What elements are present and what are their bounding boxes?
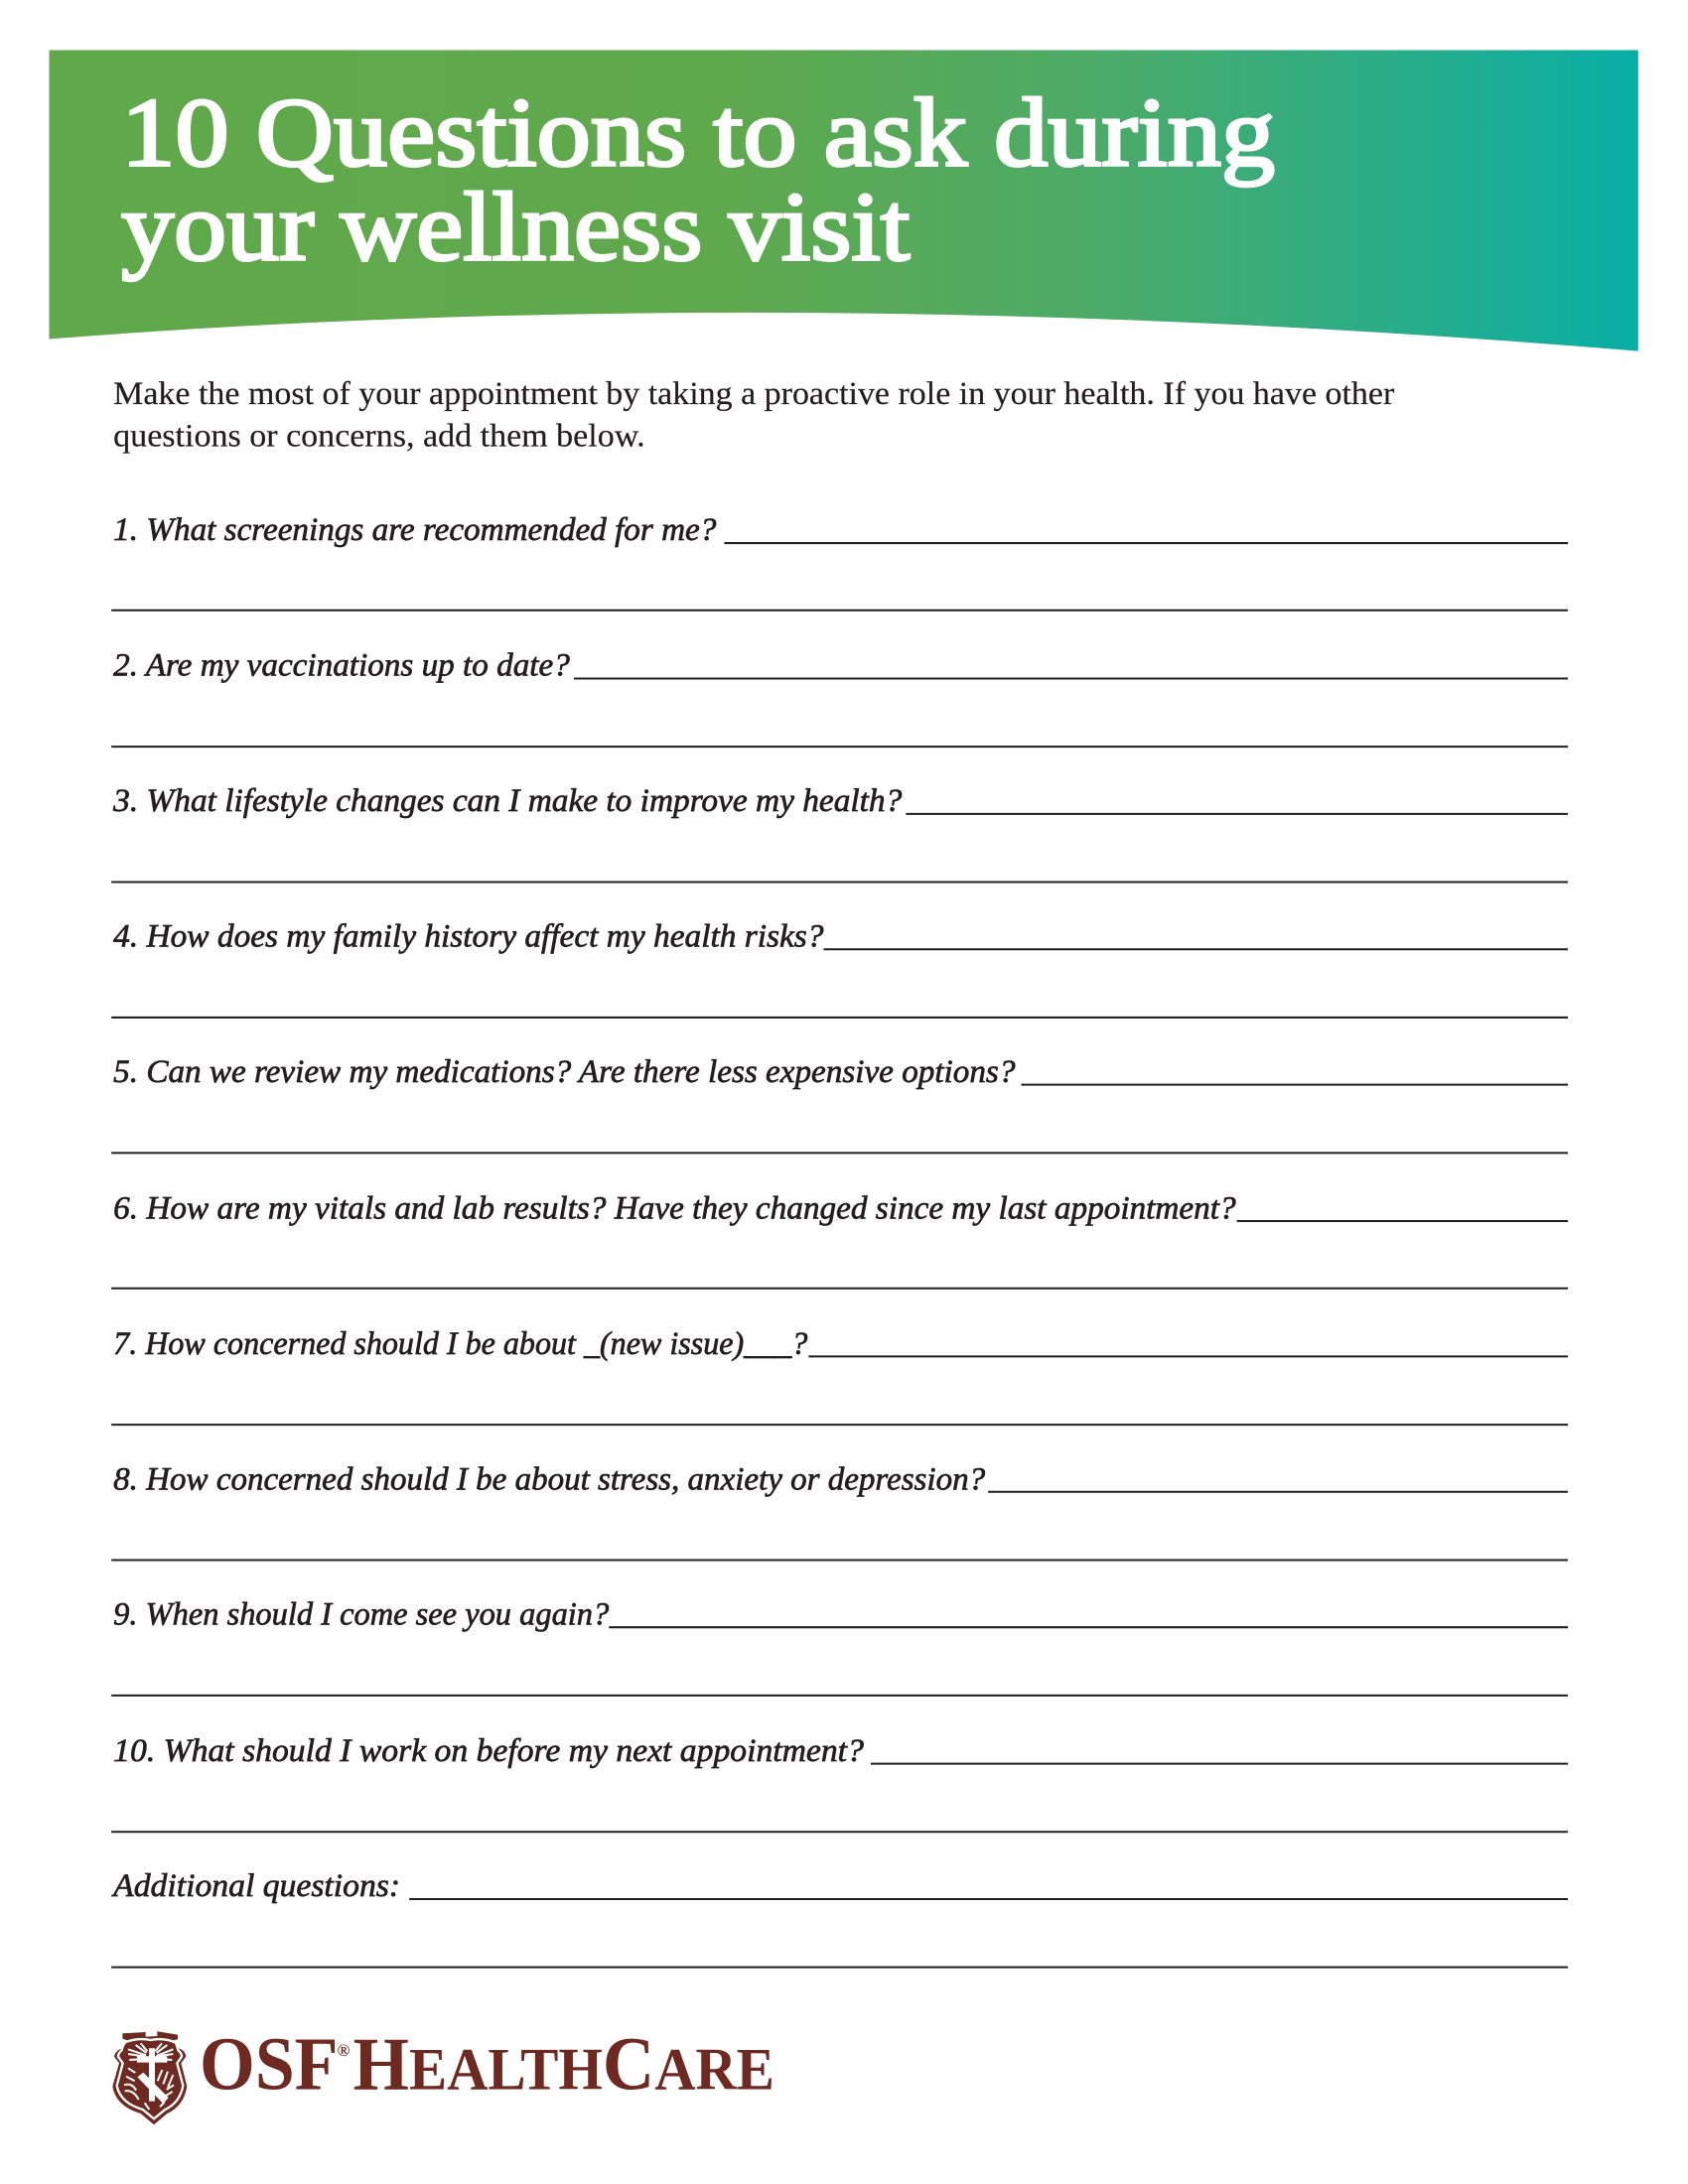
additional questions: Additional questions:: [111, 1867, 400, 1903]
question 6: [111, 1189, 1568, 1289]
question 6: 6. How are my vitals and lab results? Have they changed since my last appointment?: [113, 1189, 1236, 1225]
question 8: [111, 1460, 1568, 1561]
question 2: [111, 646, 1568, 747]
intro text: Make the most of your appointment by taking a proactive role in your health. If you have other: [113, 375, 1395, 411]
title: [121, 79, 1275, 282]
question 4: 4. How does my family history affect my health risks?: [113, 918, 823, 954]
question 7: 7. How concerned should I be about _(new issue)___?: [113, 1325, 807, 1361]
intro text: questions or concerns, add them below.: [113, 418, 645, 454]
icon: crest shield: [112, 2031, 187, 2124]
question 8: 8. How concerned should I be about stress, anxiety or depression?: [113, 1460, 985, 1496]
wordmark: OSF: [200, 2021, 338, 2106]
question 5: [111, 1053, 1568, 1153]
question 1: [111, 511, 1568, 611]
OSF HealthCare logo: [112, 2021, 774, 2124]
question 9: 9. When should I come see you again?: [113, 1596, 609, 1632]
question 3: [111, 782, 1568, 883]
question 3: 3. What lifestyle changes can I make to improve my health?: [112, 782, 902, 818]
question 10: [111, 1732, 1568, 1832]
question 5: 5. Can we review my medications? Are there less expensive options?: [113, 1053, 1015, 1089]
wordmark: HEALTHCARE: [353, 2021, 774, 2106]
question 10: 10. What should I work on before my next appointment?: [113, 1732, 864, 1768]
header banner: [50, 51, 1638, 351]
additional questions: [111, 1867, 1568, 1968]
question 1: 1. What screenings are recommended for me?: [113, 511, 716, 547]
question 9: [111, 1596, 1568, 1696]
question 2: 2. Are my vaccinations up to date?: [113, 646, 570, 682]
wordmark: ®: [337, 2041, 350, 2060]
question 7: [111, 1325, 1568, 1425]
title: 10 Questions to ask during: [121, 79, 1275, 188]
title: your wellness visit: [121, 174, 910, 282]
intro text: [113, 375, 1395, 454]
question 4: [111, 918, 1568, 1018]
